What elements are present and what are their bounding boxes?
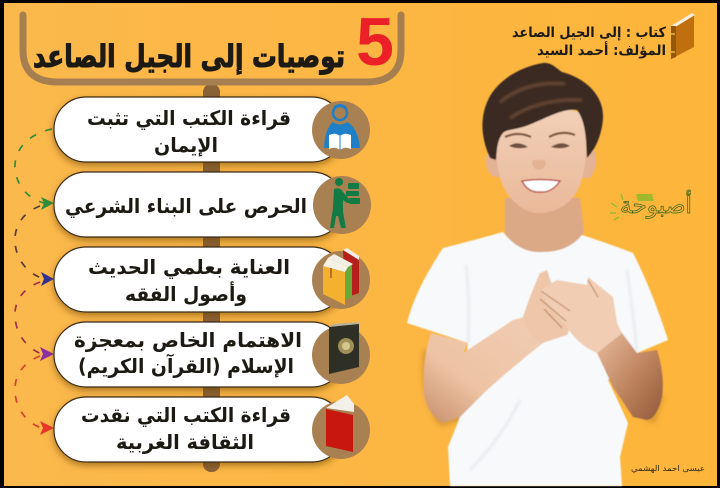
boy right arm xyxy=(597,333,663,420)
item 3 xyxy=(54,247,370,312)
boy left arm xyxy=(424,315,567,423)
text 1: الإيمان xyxy=(154,133,218,157)
boy shirt xyxy=(407,232,668,486)
circle icon 4: Quran xyxy=(312,322,370,384)
text 1 xyxy=(87,106,291,157)
boy hair xyxy=(482,63,603,160)
text 4 xyxy=(74,328,302,378)
boy eyes xyxy=(509,143,570,148)
logo: Osbouha: أصبوحة xyxy=(620,190,692,219)
boy shirt folds xyxy=(466,265,637,470)
boy photo xyxy=(407,63,668,486)
pill 5 xyxy=(54,397,344,462)
boy hair highlights xyxy=(500,83,582,118)
pill 2 xyxy=(54,172,344,237)
boy eyebrows xyxy=(505,133,575,137)
pill 1 xyxy=(54,97,344,162)
title bracket and connecting stem xyxy=(23,15,401,472)
title: توصيات إلى الجيل الصاعد xyxy=(33,39,345,75)
title xyxy=(33,4,394,80)
arrow: green xyxy=(15,129,54,210)
text 5: قراءة الكتب التي نقدت xyxy=(81,403,291,428)
text 1: قراءة الكتب التي تثبت xyxy=(87,106,291,131)
item 2 xyxy=(54,172,371,237)
text 3: وأصول الفقه xyxy=(125,280,247,306)
item 5 xyxy=(54,395,370,462)
text 5: الثقافة الغربية xyxy=(116,430,254,454)
title number 5: 5 xyxy=(356,4,394,80)
boy ears xyxy=(486,147,596,178)
text 4: الإسلام (القرآن الكريم) xyxy=(78,353,294,378)
book reference text: المؤلف: أحمد السيد xyxy=(537,41,666,59)
book reference text: كتاب : إلى الجيل الصاعد xyxy=(512,25,667,41)
text 4: الاهتمام الخاص بمعجزة xyxy=(74,328,302,352)
book reference text xyxy=(512,25,667,59)
boy arm shadow xyxy=(423,350,664,426)
circle icon 1: reader xyxy=(312,101,370,159)
boy smile xyxy=(522,180,560,192)
arrow: navy xyxy=(15,206,54,286)
boy finger lines xyxy=(540,280,598,328)
circle icon 3: books xyxy=(312,248,370,309)
text 3 xyxy=(88,255,290,306)
boy nose xyxy=(532,160,546,170)
item 1 xyxy=(54,97,370,162)
arrow: purple xyxy=(15,282,54,361)
circle icon 2: carrier xyxy=(313,176,371,234)
dashed arrows between items xyxy=(15,129,54,435)
text 2: الحرص على البناء الشرعي xyxy=(65,194,307,219)
circle icon 5: red book xyxy=(312,395,370,459)
pill 4 xyxy=(54,322,344,387)
boy right hand xyxy=(540,277,622,353)
text 5 xyxy=(81,403,291,454)
boy neck xyxy=(505,198,584,258)
text 3: العناية بعلمي الحديث xyxy=(88,255,290,280)
icon: brown book xyxy=(671,13,695,59)
boy left hand xyxy=(523,270,585,342)
signature: عيسى احمد الهشمي xyxy=(631,464,705,473)
item 4 xyxy=(54,322,370,387)
pill 3 xyxy=(54,247,344,312)
arrow: red xyxy=(15,356,54,435)
boy face xyxy=(496,108,586,213)
